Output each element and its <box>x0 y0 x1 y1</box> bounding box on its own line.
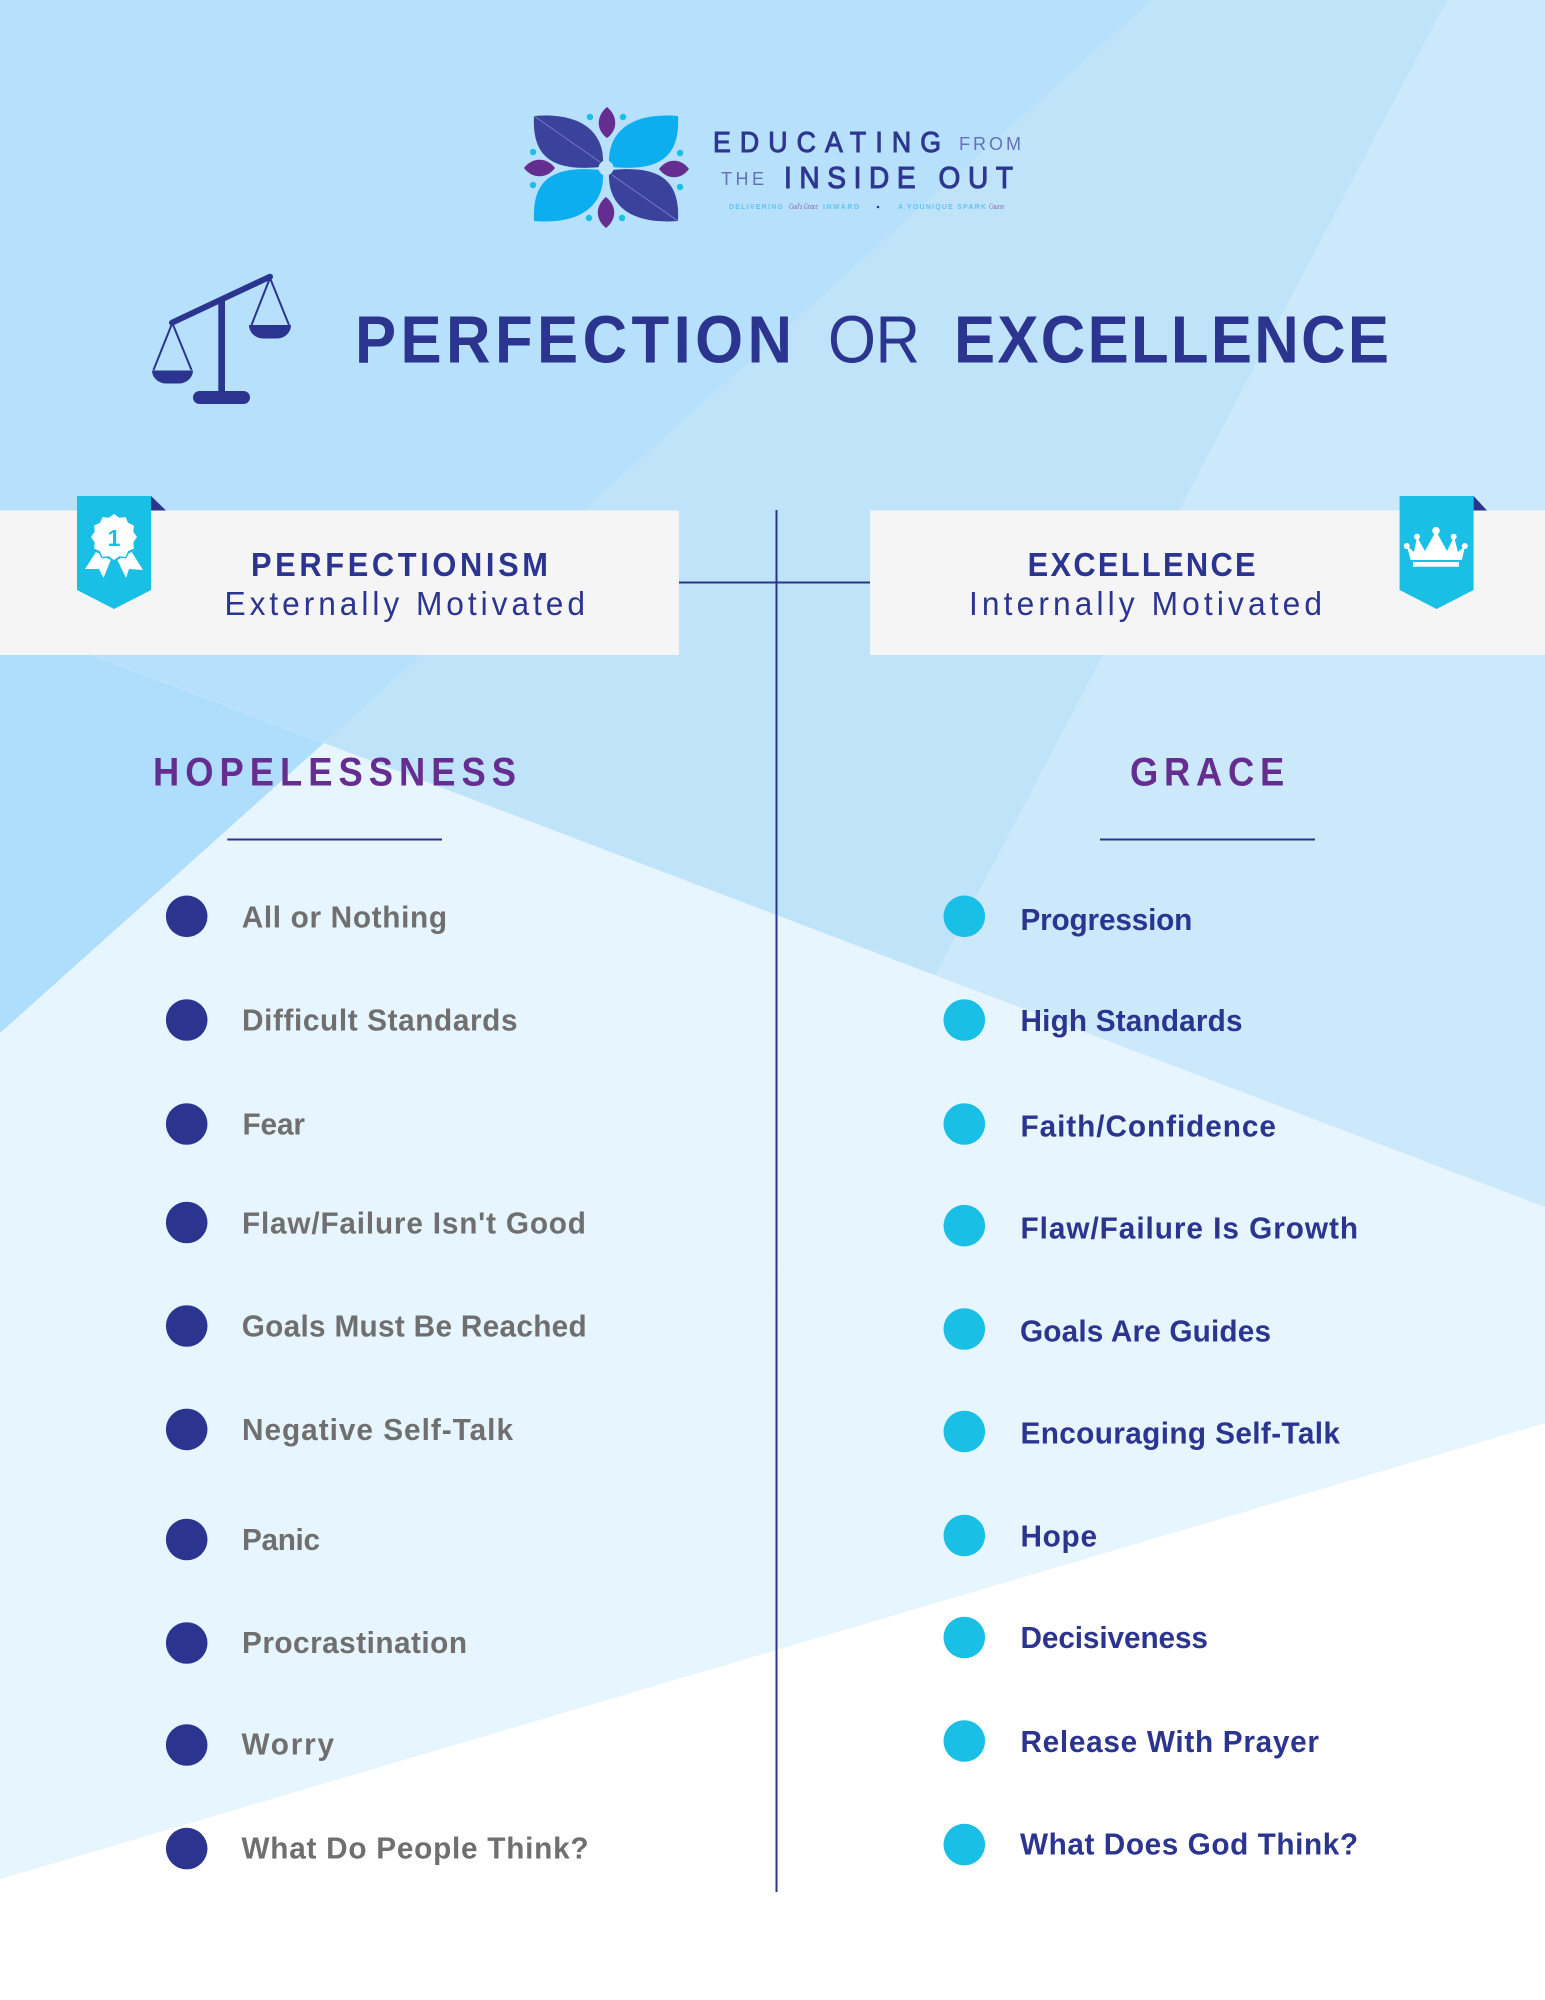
logo wordmark: FROM <box>959 134 1021 154</box>
underline: hopelessness <box>227 838 442 840</box>
item: Procrastination <box>166 1622 467 1664</box>
item: Flaw/Failure Isn't Good: Flaw/Failure Isn't Good <box>242 1206 586 1241</box>
heading: hopelessness: HOPELESSNESS <box>153 751 516 795</box>
title: OR <box>828 302 920 377</box>
item: Negative Self-Talk <box>166 1409 513 1450</box>
icon: balance scale <box>152 277 291 404</box>
item: Flaw/Failure Isn't Good <box>166 1202 586 1243</box>
item: Hope <box>944 1515 1097 1556</box>
item: Difficult Standards <box>166 999 518 1041</box>
panel: perfectionism <box>0 496 679 655</box>
panel heading: PERFECTIONISM <box>251 546 548 583</box>
item: Fear <box>166 1103 305 1145</box>
item: Encouraging Self-Talk: Encouraging Self-Talk <box>1020 1416 1340 1451</box>
item: Release With Prayer: Release With Prayer <box>1020 1724 1319 1759</box>
item: Hope: Hope <box>1020 1519 1097 1554</box>
list: grace traits <box>944 896 1358 1865</box>
item: Release With Prayer <box>944 1720 1319 1762</box>
panel: excellence <box>870 496 1545 655</box>
underline: grace <box>1100 838 1315 840</box>
item: Progression: Progression <box>1020 902 1192 937</box>
item: Panic: Panic <box>242 1523 320 1557</box>
item: Worry <box>166 1724 334 1766</box>
item: What Do People Think? <box>166 1828 589 1869</box>
item: Faith/Confidence <box>944 1103 1276 1145</box>
heading: grace: GRACE <box>1130 751 1284 795</box>
item: What Does God Think?: What Does God Think? <box>1020 1827 1358 1862</box>
item: All or Nothing: All or Nothing <box>242 900 447 935</box>
list: hopelessness traits <box>166 896 589 1869</box>
item: Difficult Standards: Difficult Standards <box>242 1003 518 1038</box>
logo wordmark: God's Grace <box>789 202 818 211</box>
item: Decisiveness <box>944 1617 1208 1658</box>
icon: ribbon with award medal <box>77 496 166 609</box>
item: What Does God Think? <box>944 1824 1358 1865</box>
logo wordmark <box>713 126 1021 211</box>
logo wordmark: THE <box>721 169 764 189</box>
logo wordmark: INWARD <box>823 204 859 211</box>
item: Faith/Confidence: Faith/Confidence <box>1020 1109 1276 1144</box>
item: Goals Are Guides: Goals Are Guides <box>1020 1314 1271 1348</box>
title <box>355 302 1389 377</box>
item: Goals Are Guides <box>944 1308 1271 1350</box>
panel subheading: Externally Motivated <box>224 585 585 622</box>
logo <box>524 107 1021 228</box>
item: Negative Self-Talk: Negative Self-Talk <box>242 1412 513 1447</box>
item: All or Nothing <box>166 896 447 937</box>
item: Flaw/Failure Is Growth <box>944 1205 1358 1246</box>
title: PERFECTION <box>355 302 792 377</box>
item: What Do People Think?: What Do People Think? <box>242 1831 589 1865</box>
logo wordmark: DELIVERING <box>729 204 784 211</box>
panel subheading: Internally Motivated <box>969 585 1322 622</box>
title: EXCELLENCE <box>954 302 1389 377</box>
logo wordmark: EDUCATING <box>713 126 941 158</box>
logo wordmark: A YOUNIQUE SPARK <box>898 204 986 211</box>
icon: ribbon with crown <box>1400 496 1487 609</box>
icon: flower logo <box>524 107 689 228</box>
logo wordmark: Course <box>989 202 1004 211</box>
item: Flaw/Failure Is Growth: Flaw/Failure Is Growth <box>1020 1211 1358 1246</box>
item: High Standards: High Standards <box>1020 1003 1243 1038</box>
item: Goals Must Be Reached: Goals Must Be Reached <box>242 1309 587 1344</box>
item: High Standards <box>944 999 1243 1041</box>
icon: ribbon with award medal: 1 <box>108 525 121 551</box>
item: Procrastination: Procrastination <box>242 1625 467 1660</box>
center divider lines <box>679 510 870 1892</box>
logo wordmark: INSIDE OUT <box>784 161 1013 195</box>
item: Goals Must Be Reached <box>166 1305 587 1347</box>
item: Encouraging Self-Talk <box>944 1411 1340 1452</box>
item: Panic <box>166 1519 320 1560</box>
panel heading: EXCELLENCE <box>1028 546 1256 583</box>
item: Decisiveness: Decisiveness <box>1020 1620 1208 1655</box>
item: Fear: Fear <box>242 1107 305 1142</box>
item: Progression <box>944 896 1192 937</box>
item: Worry: Worry <box>242 1727 334 1762</box>
